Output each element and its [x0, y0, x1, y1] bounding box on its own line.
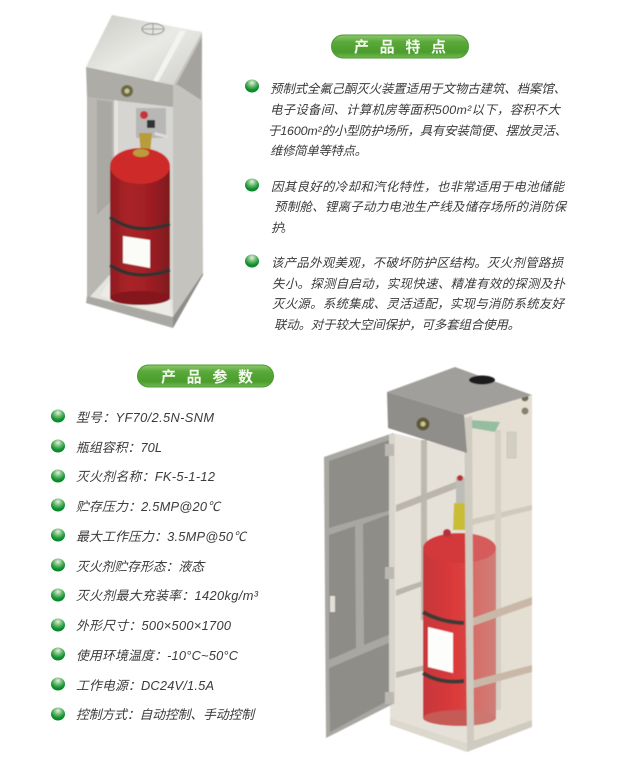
text block: feature 1: 于1600m²的小型防护场所，具有安装简便、摆放灵活、 — [268, 124, 567, 138]
parameter list: 外形尺寸：500×500×1700 — [76, 618, 232, 633]
bullet — [245, 178, 259, 192]
text block: feature 1 — [245, 80, 567, 158]
text block: feature 3 — [245, 254, 566, 332]
text block: feature 1: 预制式全氟己酮灭火装置适用于文物古建筑、档案馆、 — [270, 82, 566, 96]
text block: feature 1: 电子设备间、计算机房等面积500m²以下，容积不大 — [270, 103, 562, 117]
text block: feature 3: 灭火源。系统集成、灵活适配，实现与消防系统友好 — [272, 297, 566, 311]
text block: feature 1: 维修简单等特点。 — [270, 144, 367, 158]
parameter list: 灭火剂最大充装率：1420kg/m³ — [76, 588, 259, 603]
heading: product features: 产品特点 — [354, 38, 446, 56]
parameter list: 瓶组容积：70L — [76, 440, 162, 455]
text block: feature 2 — [245, 178, 568, 235]
text block: feature 2: 因其良好的冷却和汽化特性，也非常适用于电池储能 — [271, 180, 566, 194]
parameter list: 型号：YF70/2.5N-SNM — [76, 410, 214, 425]
parameter list: 最大工作压力：3.5MP@50℃ — [76, 529, 248, 544]
text block: feature 2: 护。 — [271, 221, 293, 235]
parameter list: 使用环境温度：-10°C~50°C — [76, 648, 239, 663]
parameter list: 灭火剂贮存形态：液态 — [76, 559, 206, 574]
text block: feature 2: 预制舱、锂离子动力电池生产线及储存场所的消防保 — [274, 200, 568, 214]
bullet — [245, 80, 259, 92]
parameter list: 灭火剂名称：FK-5-1-12 — [76, 469, 215, 484]
text block: feature 3: 联动。对于较大空间保护，可多套组合使用。 — [274, 318, 520, 332]
text block: feature 3: 该产品外观美观，不破坏防护区结构。灭火剂管路损 — [271, 256, 565, 270]
text block: feature 3: 失小。探测自启动，实现快速、精准有效的探测及扑 — [272, 277, 566, 291]
parameter list — [51, 410, 259, 722]
heading: product parameters — [138, 365, 274, 387]
bullet — [245, 254, 259, 268]
parameter list: 贮存压力：2.5MP@20℃ — [76, 499, 222, 514]
parameter list: 工作电源：DC24V/1.5A — [76, 678, 214, 693]
heading: product parameters: 产品参数 — [161, 368, 253, 386]
heading: product features — [332, 35, 468, 58]
illustration: large cabinet with open door — [324, 367, 532, 752]
illustration: small cabinet with extinguisher — [86, 15, 203, 328]
parameter list: 控制方式：自动控制、手动控制 — [76, 707, 256, 722]
